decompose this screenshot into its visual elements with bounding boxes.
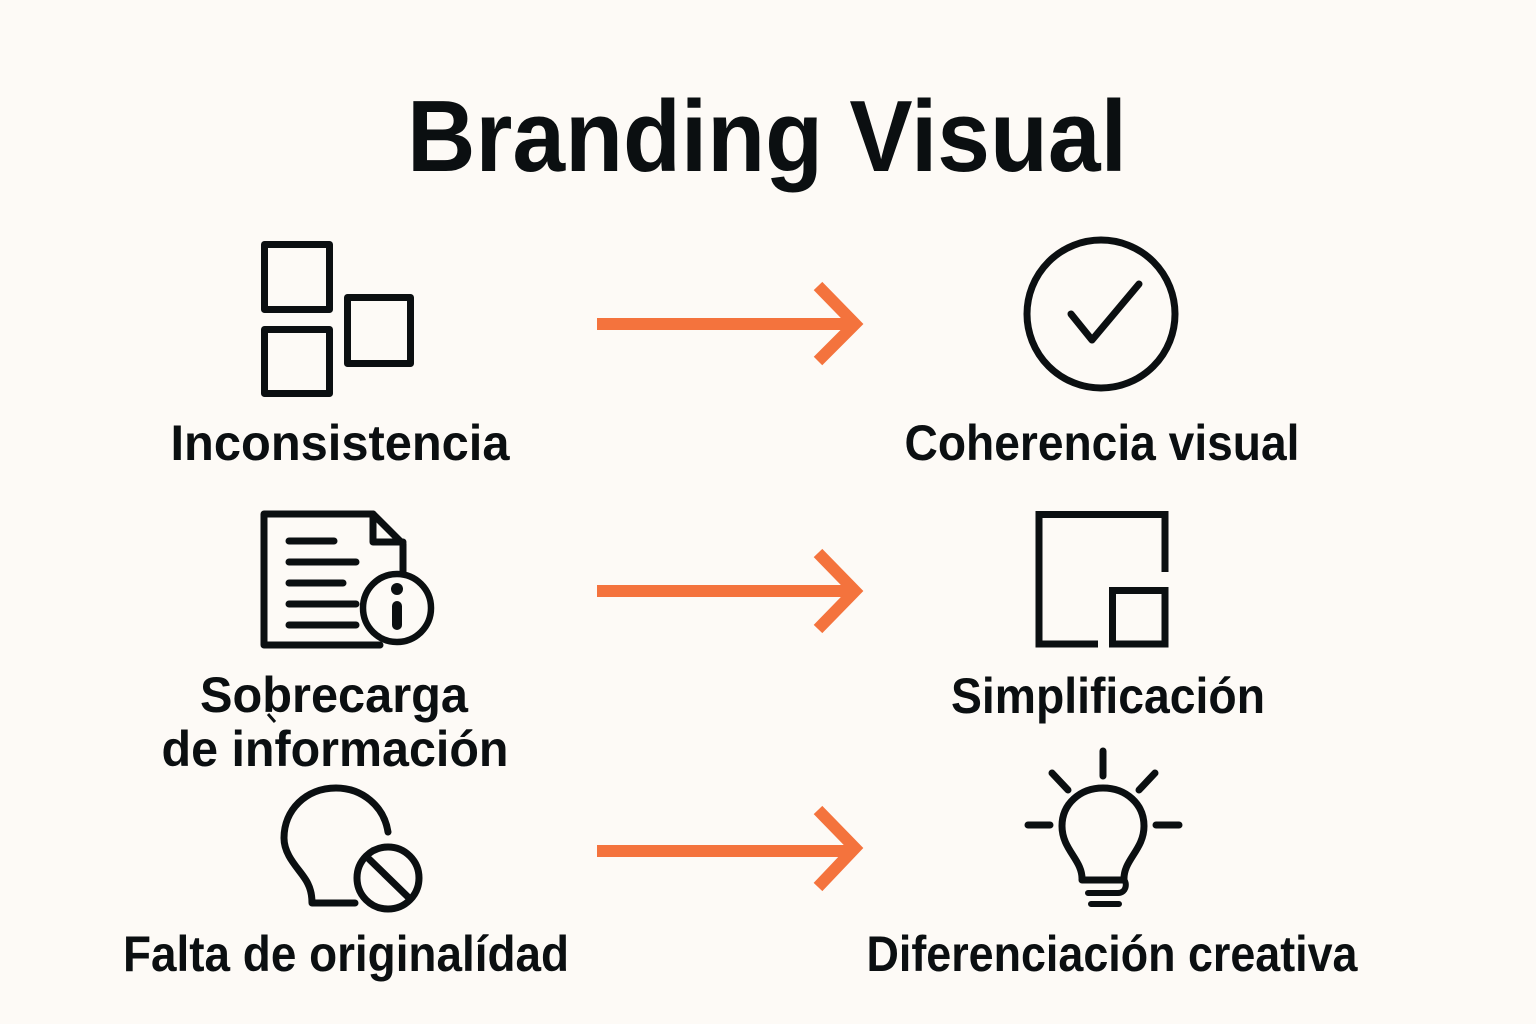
icon: head with prohibition sign	[284, 788, 419, 909]
head outline	[284, 788, 388, 903]
title: Branding Visual	[407, 81, 1127, 193]
label: Simplificación: Simplificación	[951, 668, 1265, 724]
icon: check circle	[1027, 240, 1175, 388]
label: Falta de originalidad: Falta de originalídad	[123, 926, 569, 982]
icon: simplified square	[1039, 514, 1165, 644]
icon: document with info badge	[264, 514, 431, 645]
label: Sobrecarga de información: Sobrecarga	[200, 667, 469, 723]
arrow: row 2	[597, 553, 855, 629]
info badge	[363, 574, 431, 642]
label: Sobrecarga de información: de información	[162, 721, 508, 777]
icon: scattered squares	[264, 244, 410, 394]
label: Sobrecarga de información	[162, 667, 508, 777]
document outline	[264, 514, 403, 645]
prohibition sign	[357, 847, 419, 909]
arrow: row 1	[597, 286, 855, 361]
label: Coherencia visual: Coherencia visual	[904, 415, 1300, 471]
icon: light bulb	[1028, 751, 1179, 904]
arrow: row 3	[597, 810, 855, 887]
label: Diferenciación creativa: Diferenciación creativa	[866, 926, 1359, 982]
label: Inconsistencia: Inconsistencia	[170, 415, 511, 471]
